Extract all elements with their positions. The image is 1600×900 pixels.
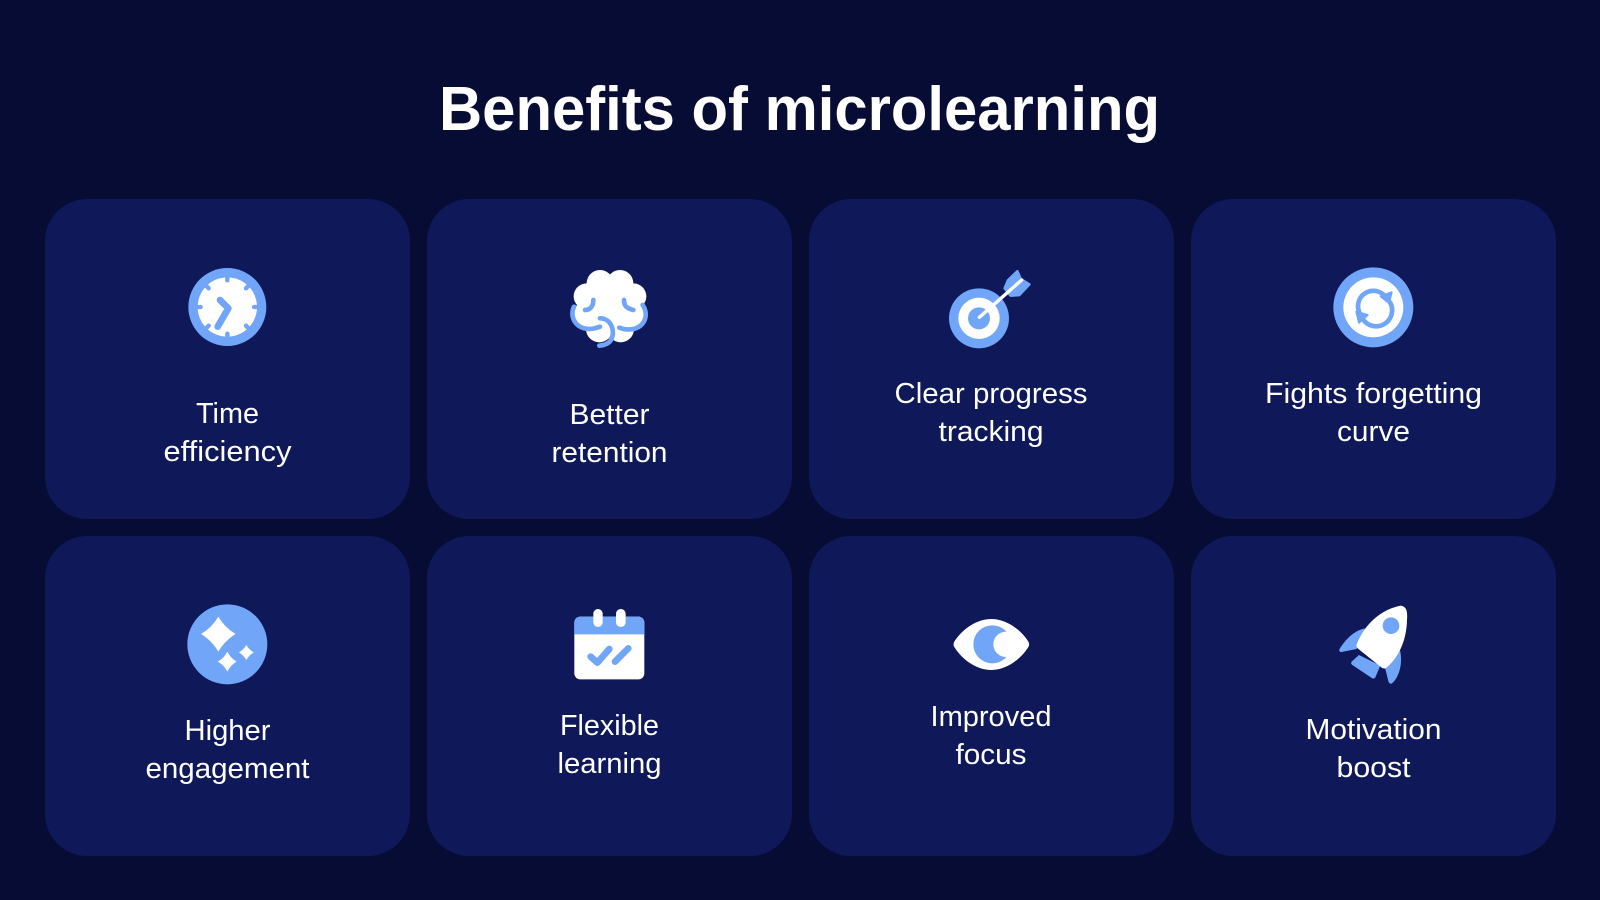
label: [552, 399, 668, 469]
label: [164, 398, 292, 468]
label: learning: [558, 748, 662, 780]
label: [1265, 378, 1482, 448]
icon: target with arrow: [949, 271, 1029, 348]
panel: clear progress tracking: [809, 199, 1174, 519]
label: curve: [1337, 416, 1410, 448]
label: [930, 701, 1052, 771]
label: Clear progress: [894, 378, 1088, 410]
icon: eye: [953, 619, 1029, 670]
label: Better: [570, 399, 650, 431]
panel: flexible learning: [427, 536, 792, 856]
label: [894, 378, 1088, 448]
label: Flexible: [560, 710, 659, 742]
icon: clock: [188, 268, 266, 346]
label: focus: [956, 739, 1026, 771]
label: Improved: [930, 701, 1052, 733]
panel: better retention: [427, 199, 792, 519]
icon: brain: [572, 270, 647, 346]
label: efficiency: [164, 436, 292, 468]
label: Time: [196, 398, 259, 430]
panel: higher engagement: [45, 536, 410, 856]
icon: rocket: [1339, 606, 1407, 684]
title: Benefits of microlearning: [439, 75, 1160, 144]
label: tracking: [938, 416, 1044, 448]
label: retention: [552, 437, 668, 469]
label: Higher: [184, 715, 271, 747]
panel: fights forgetting curve: [1191, 199, 1556, 519]
label: boost: [1336, 752, 1410, 784]
icon: refresh: [1333, 267, 1413, 347]
label: [146, 715, 310, 785]
label: Fights forgetting: [1265, 378, 1482, 410]
icon: sparkles: [187, 604, 267, 684]
panel: time efficiency: [45, 199, 410, 519]
label: Motivation: [1306, 714, 1442, 746]
label: engagement: [146, 753, 310, 785]
label: [1306, 714, 1442, 784]
panel: improved focus: [809, 536, 1174, 856]
icon: calendar: [574, 609, 644, 679]
panel: motivation boost: [1191, 536, 1556, 856]
label: [558, 710, 662, 780]
